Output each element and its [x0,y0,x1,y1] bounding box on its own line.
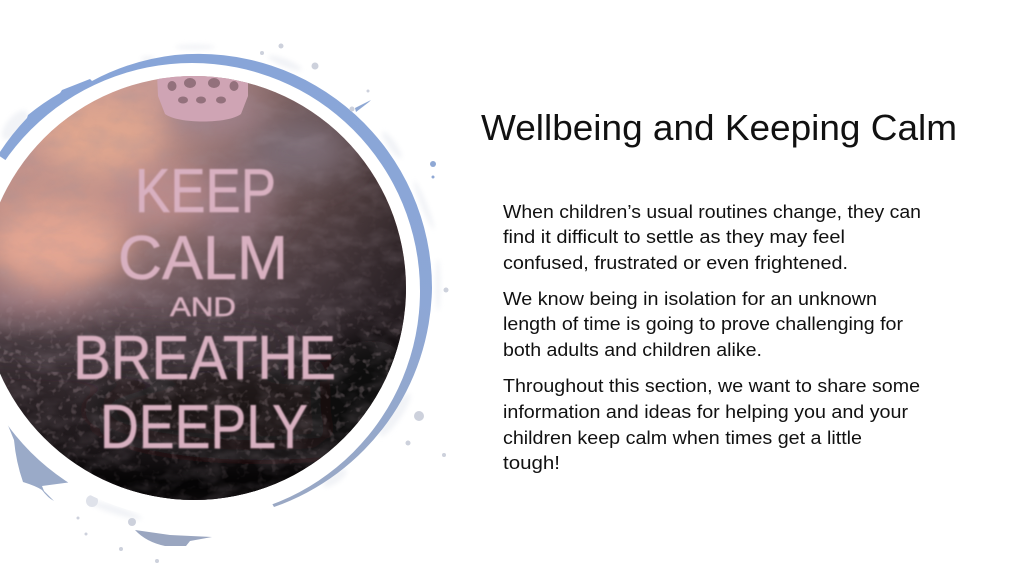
paragraph: isolation: length of time is going to prove challenging for [503,313,903,334]
paragraph: routines change: find it difficult to settle as they may feel [503,226,845,247]
sky and heather background [0,76,430,507]
paragraph: this section: information and ideas for helping you and your [503,401,908,422]
paragraph: isolation [503,288,903,360]
crown [157,74,248,122]
paragraph: routines change: confused, frustrated or even frightened. [503,252,848,273]
lower brush stroke [135,530,212,546]
paragraph: this section: Throughout this section, we want to share some [503,375,920,396]
paragraph: isolation: We know being in isolation for an unknown [503,288,877,309]
white ring [0,63,420,519]
title: Wellbeing and Keeping Calm [481,107,957,148]
paragraph: this section: children keep calm when times get a little [503,427,862,448]
paragraph: this section [503,375,920,473]
paragraph: this section: tough! [503,452,560,473]
lower-left wash [0,288,194,501]
poster lettering: DEEPLY [100,393,308,462]
poster image: keep calm and breathe deeply [0,74,430,507]
splatter haze [0,44,441,522]
body text [503,201,921,473]
paragraph: routines change: When children’s usual routines change, they can [503,201,921,222]
watercolour splatter frame [0,44,448,563]
paragraph: routines change [503,201,921,273]
poster lettering: BREATHE [73,324,336,393]
poster lettering [73,157,336,462]
paragraph: isolation: both adults and children alike. [503,339,762,360]
blue ring [0,54,432,507]
poster lettering: KEEP [135,157,276,226]
poster lettering: AND [170,292,236,322]
paint droplets [76,44,448,563]
poster lettering: CALM [118,224,288,293]
